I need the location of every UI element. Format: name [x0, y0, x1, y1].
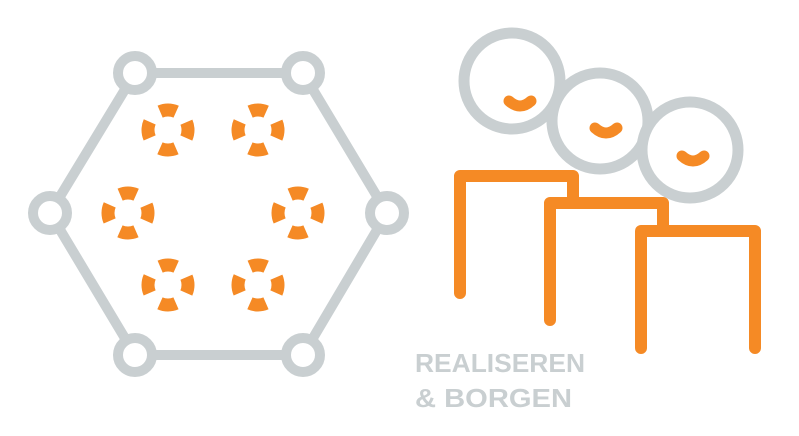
label text	[415, 348, 585, 413]
label text: & BORGEN	[415, 383, 572, 413]
people group	[460, 33, 755, 348]
hexagon network	[33, 56, 404, 372]
label text: REALISEREN	[415, 348, 585, 378]
lifebuoy icons	[108, 110, 318, 305]
